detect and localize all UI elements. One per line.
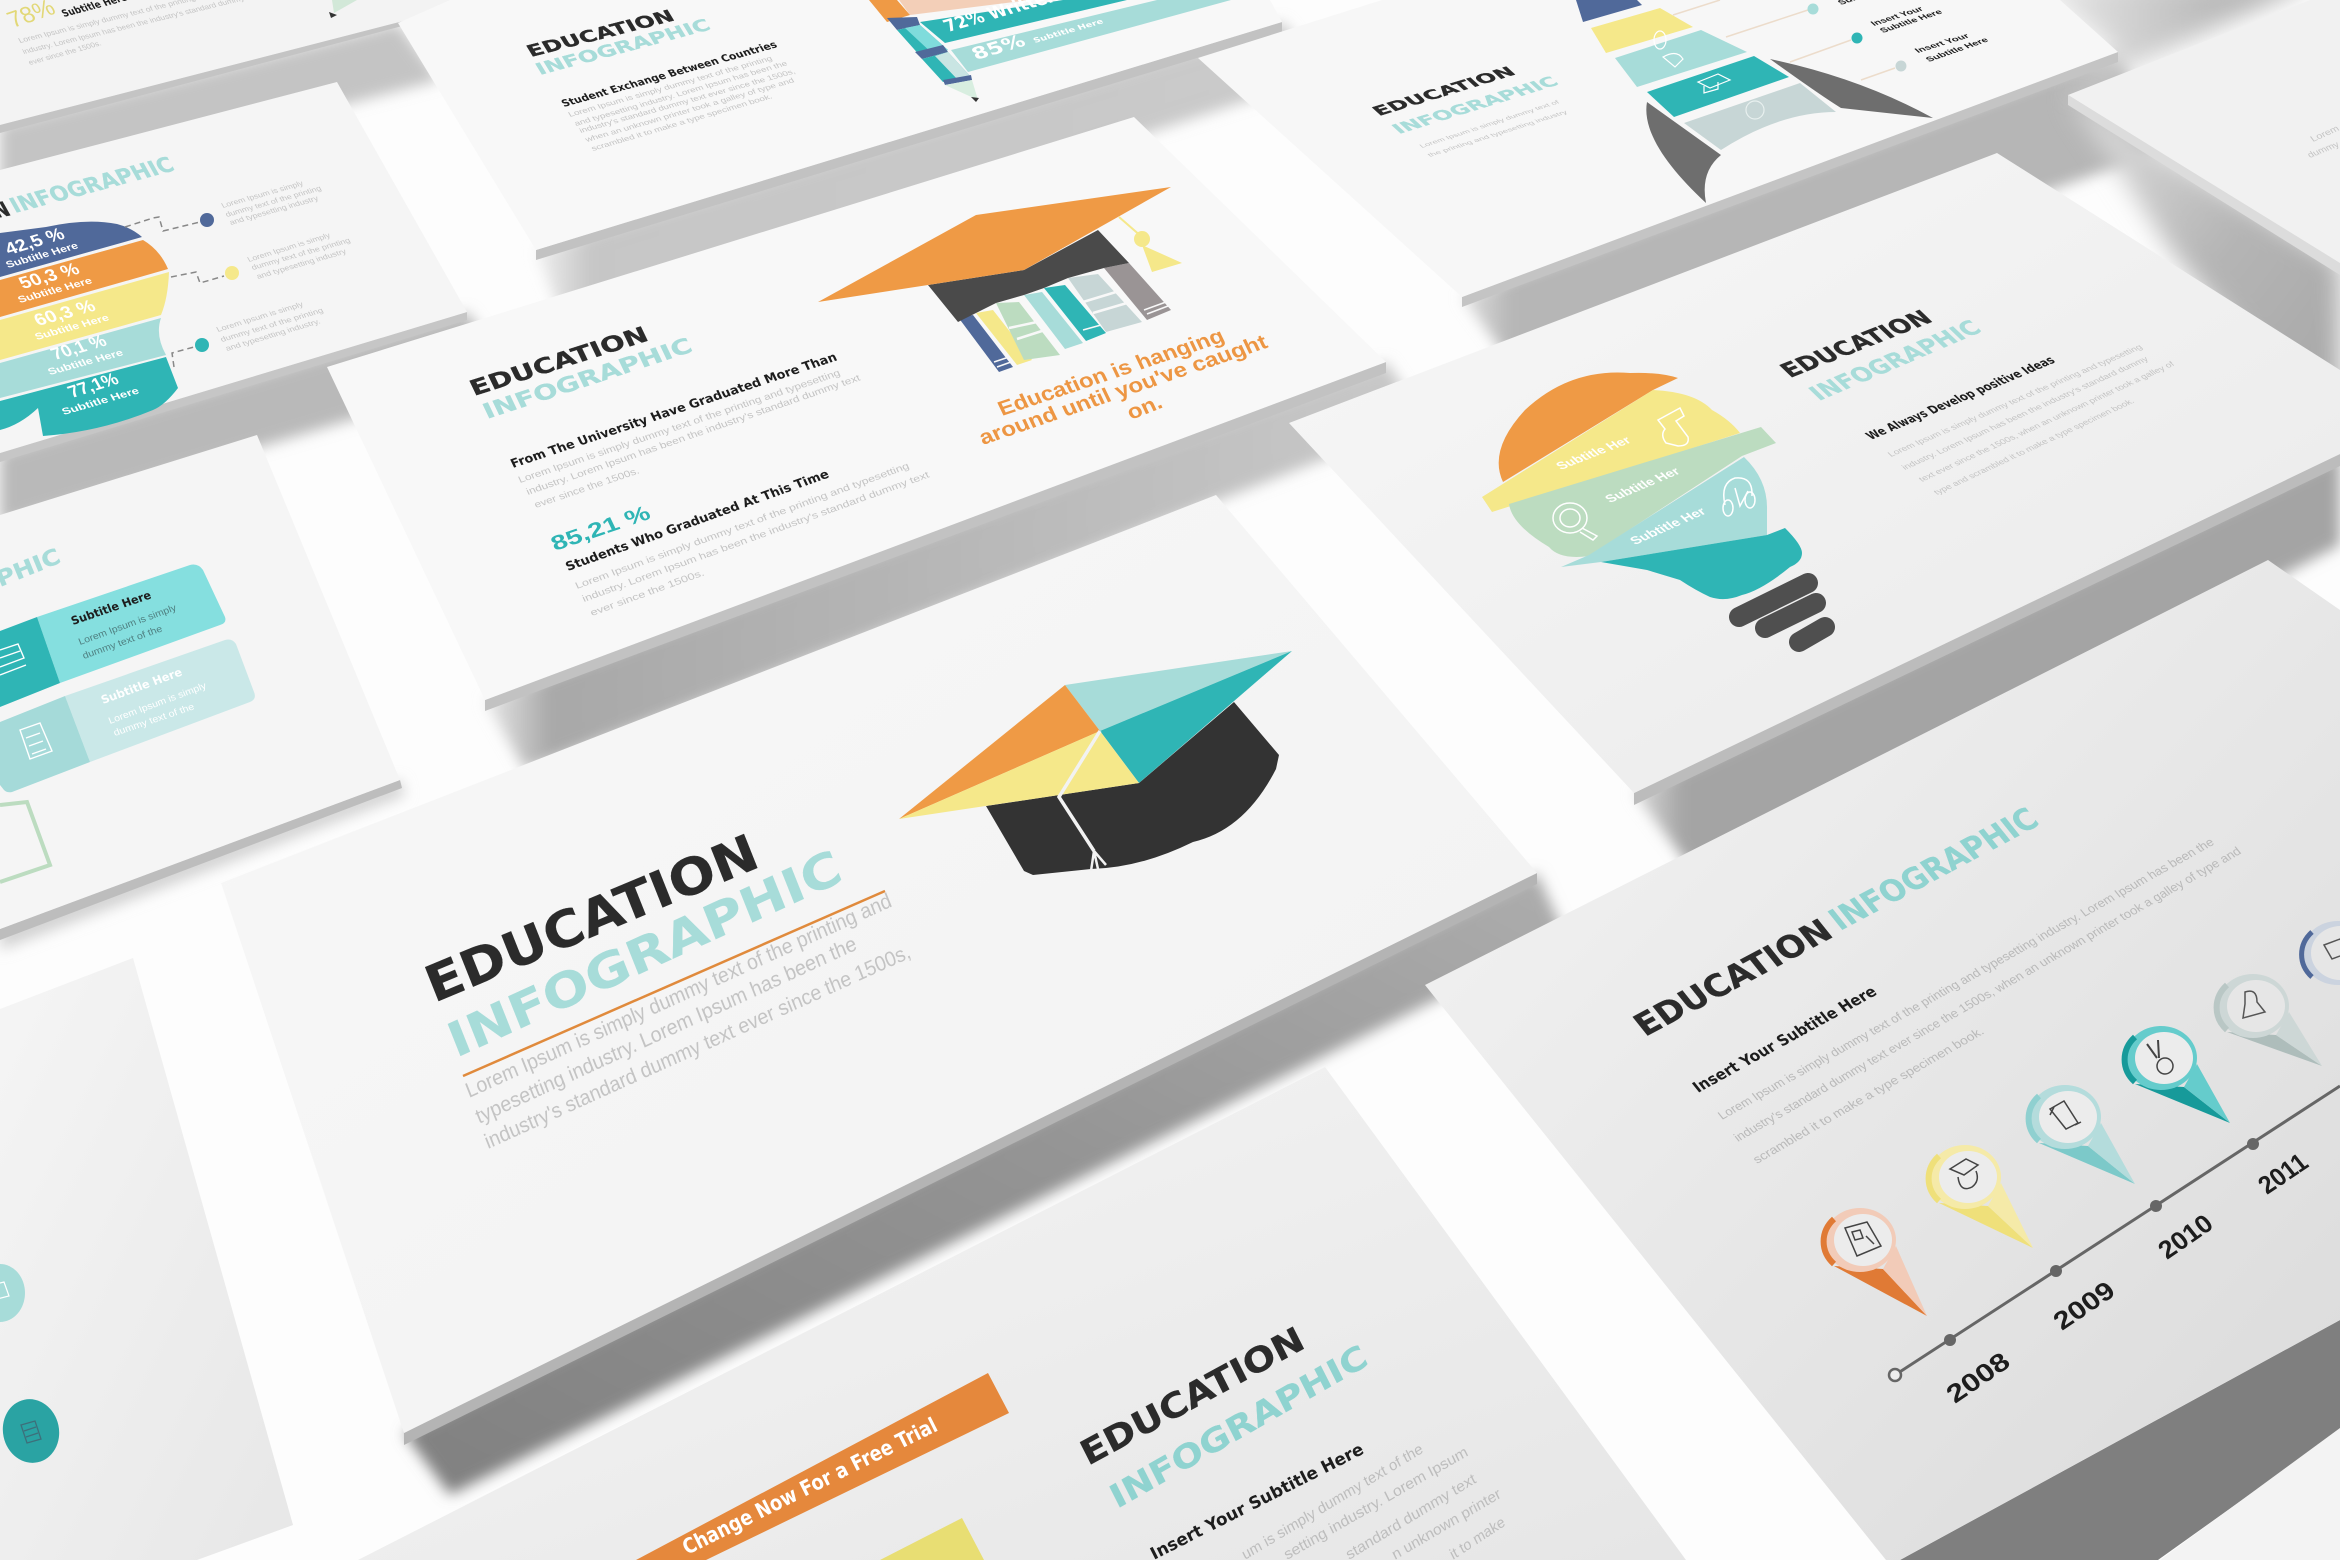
title <box>0 153 179 223</box>
callouts with dashed connectors: Lorem Ipsum is simply <box>215 300 305 334</box>
body text: industry's standard dummy text ever since the 1500s, <box>577 67 797 135</box>
timeline axis <box>1889 1086 2340 1381</box>
body text: scrambled it to make a type specimen book. <box>1750 1024 1987 1166</box>
panel: graduated slide with book cap: Lorem Ipsum is simply dummy text of the printing and typesetting <box>517 368 842 486</box>
panel: timeline slide: Insert Your Subtitle Here <box>1689 982 1881 1096</box>
panel: top left slide with 78% <box>0 0 500 133</box>
panel: bottom slide with orange banner <box>358 1067 1686 1560</box>
body text: um is simply dummy text of the <box>1239 1440 1426 1560</box>
year labels <box>1940 1147 2314 1409</box>
title: INFOGRAPHIC <box>532 16 715 79</box>
callouts with dashed connectors: and typesetting industry. <box>224 317 322 353</box>
head shaped stacked chart: Subtitle Here <box>33 313 112 343</box>
light bulb chart <box>1482 372 1825 642</box>
callouts with dashed connectors: Lorem Ipsum is simply <box>246 231 332 264</box>
body text: ever since the 1500s. <box>533 466 641 511</box>
title <box>1074 1319 1374 1516</box>
body text: Lorem Ipsum is simply dummy text of <box>1418 100 1562 149</box>
head shaped stacked chart <box>0 222 178 436</box>
title <box>1368 64 1564 137</box>
pin 2008 <box>1824 1208 1927 1316</box>
panel: graduated slide with book cap: Students Who Graduated At This Time <box>563 466 831 574</box>
box 1: Lorem Ipsum is simply <box>77 603 178 648</box>
callouts with dashed connectors: dummy text of the printing <box>250 236 352 272</box>
title: EDUCATION <box>1368 64 1520 119</box>
body text: setting industry. Lorem Ipsum <box>1281 1443 1471 1560</box>
callouts with dashed connectors: and typesetting industry <box>228 194 320 227</box>
head shaped stacked chart: 42,5 % <box>1 224 68 258</box>
title <box>466 323 697 424</box>
panel: graduated slide with book cap: From The University Have Graduated More Than <box>508 349 839 471</box>
icon: green outline <box>0 802 50 882</box>
pencil tip <box>329 0 357 18</box>
icon: dark teal circle <box>0 1394 65 1468</box>
body text <box>1885 342 2177 496</box>
title: EDUCATION <box>523 7 679 61</box>
year labels: 2010 <box>2152 1208 2219 1265</box>
panel: bottom slide with orange banner: INFOGRAPHIC <box>1103 1337 1374 1516</box>
body text: Lorem <box>2308 124 2340 144</box>
icon: graduation cap with books <box>818 187 1182 372</box>
rocket labels: Subtitle Here <box>1923 36 1991 63</box>
light bulb chart: Subtitle Her <box>1552 434 1634 472</box>
panel: graduated slide with book cap: Lorem Ipsum is simply dummy text of the printing and typesetting <box>574 461 911 592</box>
panel: graduated slide with book cap <box>327 117 1386 711</box>
panel: head chart slide <box>0 82 467 462</box>
pin 2009 <box>1929 1145 2033 1248</box>
rocket chart <box>1576 0 1933 203</box>
panel: light bulb slide <box>1289 153 2340 805</box>
title: INFOGRAPHIC <box>1388 74 1564 137</box>
panel: main hero slide: EDUCATION <box>417 823 766 1014</box>
head shaped stacked chart: 50,3 % <box>15 259 83 292</box>
icon: headphones <box>1723 478 1755 516</box>
stat body text: ever since the 1500s. <box>27 39 103 67</box>
box 1 <box>0 565 225 707</box>
body text <box>566 54 797 153</box>
head shaped stacked chart: 77,1% <box>64 369 122 401</box>
rocket labels: Insert Your <box>1868 4 1926 27</box>
pencil bar chart <box>869 0 1231 102</box>
body text: the printing and typesetting industry <box>1426 109 1570 158</box>
panel: light bulb slide: We Always Develop positive Ideas <box>1863 354 2059 443</box>
body text <box>1239 1440 1508 1560</box>
panel: bottom slide with orange banner: Insert Your Subtitle Here <box>1147 1440 1367 1560</box>
pin navy <box>2302 921 2340 985</box>
body text <box>2305 124 2340 160</box>
icon: graduation cap <box>899 651 1292 875</box>
head shaped stacked chart: Subtitle Here <box>60 386 142 418</box>
pin 2011 <box>2125 1026 2230 1123</box>
quote: Education is hanging <box>994 325 1228 421</box>
stat body text <box>574 461 932 619</box>
panel: timeline slide: INFOGRAPHIC <box>1821 801 2046 937</box>
icon: magnifier <box>1553 503 1597 540</box>
stat 78%: 78% <box>3 0 60 33</box>
year labels: 2008 <box>1940 1346 2016 1409</box>
title: EDUCATION <box>1074 1319 1311 1474</box>
title <box>1774 306 1987 405</box>
body text: and typesetting industry. Lorem Ipsum has been the <box>572 59 789 128</box>
callouts with dashed connectors: dummy text of the printing <box>219 306 325 344</box>
head shaped stacked chart: Subtitle Here <box>46 348 126 378</box>
connector lines with dots <box>1673 0 1906 80</box>
quote <box>975 325 1271 450</box>
panel: graduated slide with book cap: industry. Lorem Ipsum has been the industry's standard dummy text <box>581 470 932 605</box>
light bulb chart: Subtitle Her <box>1626 505 1709 547</box>
box 1: Subtitle Here <box>69 588 153 628</box>
orange banner <box>636 1373 1009 1560</box>
rocket labels <box>1835 0 1991 63</box>
box 2 <box>0 640 255 792</box>
box 2: dummy text of the <box>112 702 196 739</box>
panel: main hero slide: INFOGRAPHIC <box>440 840 849 1069</box>
title: EDUCATION <box>1774 306 1938 382</box>
body text <box>517 368 863 511</box>
rocket labels: Subtitle Here <box>1877 8 1945 34</box>
light bulb chart: Subtitle Her <box>1601 465 1683 505</box>
title <box>523 7 715 79</box>
panel: main hero slide: typesetting industry. Lorem Ipsum has been the <box>472 932 860 1129</box>
title <box>417 823 849 1069</box>
body text: when an unknown printer took a galley of type and <box>582 76 796 144</box>
stat body text: ever since the 1500s. <box>589 568 706 619</box>
panel: far right slide <box>2068 0 2340 275</box>
box 1: dummy text of the <box>81 624 164 662</box>
head shaped stacked chart: 70,1 % <box>47 331 110 363</box>
title: INFOGRAPHIC <box>6 153 179 218</box>
body text: type and scrambled it to make a type specimen book. <box>1931 396 2136 496</box>
background slide: lower right corner <box>2160 1428 2340 1560</box>
panel: main hero slide <box>221 495 1537 1445</box>
head shaped stacked chart: Subtitle Here <box>16 276 95 306</box>
panel: left slide with subtitle boxes <box>0 435 402 940</box>
panel: timeline slide <box>1425 560 2340 1560</box>
title: EDUCATION <box>1626 912 1840 1043</box>
callouts with dashed connectors: and typesetting industry <box>255 247 348 281</box>
box 2: Lorem Ipsum is simply <box>107 681 208 727</box>
stat 85,21 %: 85,21 % <box>547 502 655 556</box>
title: INFOGRAPHIC <box>1803 316 1987 405</box>
quote: on. <box>1123 391 1166 425</box>
body text: dummy <box>2305 139 2340 160</box>
pin 2012 <box>2217 974 2322 1066</box>
body text: Lorem Ipsum is simply dummy text of the printing <box>566 54 774 119</box>
body text <box>462 889 914 1154</box>
panel: graduated slide with book cap: around until you've caught <box>975 331 1271 450</box>
pencil bar chart: Subtitle Here <box>1031 17 1105 45</box>
pin 2010 <box>2029 1085 2135 1184</box>
title: EDUCATION <box>466 323 653 401</box>
stat body text <box>17 0 246 67</box>
year labels: 2011 <box>2252 1147 2314 1200</box>
box 2: Subtitle Here <box>99 665 184 707</box>
body text: scrambled it to make a type specimen book. <box>589 92 774 153</box>
icon: light teal circle <box>0 1264 25 1322</box>
pencil bar chart: 85% <box>968 31 1030 64</box>
callouts with dashed connectors: dummy text of the printing <box>224 184 323 219</box>
panel: lower left slide with circles <box>0 958 293 1560</box>
icon: flask <box>1658 408 1688 446</box>
panel: graduated slide with book cap: industry. Lorem Ipsum has been the industry's standard dummy text <box>525 373 863 498</box>
body text: standard dummy text <box>1343 1470 1480 1560</box>
yellow shape <box>880 1518 984 1560</box>
divider line <box>463 891 885 1076</box>
rocket labels: Insert Your <box>1912 31 1972 54</box>
panel: rocket slide <box>1198 0 2118 307</box>
callouts with dashed connectors: Lorem Ipsum is simply <box>220 179 305 210</box>
head shaped stacked chart: Subtitle Here <box>4 241 81 271</box>
title: INFOGRAPHIC <box>479 334 697 424</box>
year labels: 2009 <box>2047 1275 2121 1336</box>
callouts with dashed connectors <box>125 179 352 367</box>
panel: bottom slide with orange banner: Change Now For a Free Trial <box>678 1413 941 1559</box>
panel: student exchange slide <box>398 0 1282 260</box>
head shaped stacked chart: 60,3 % <box>30 296 99 329</box>
